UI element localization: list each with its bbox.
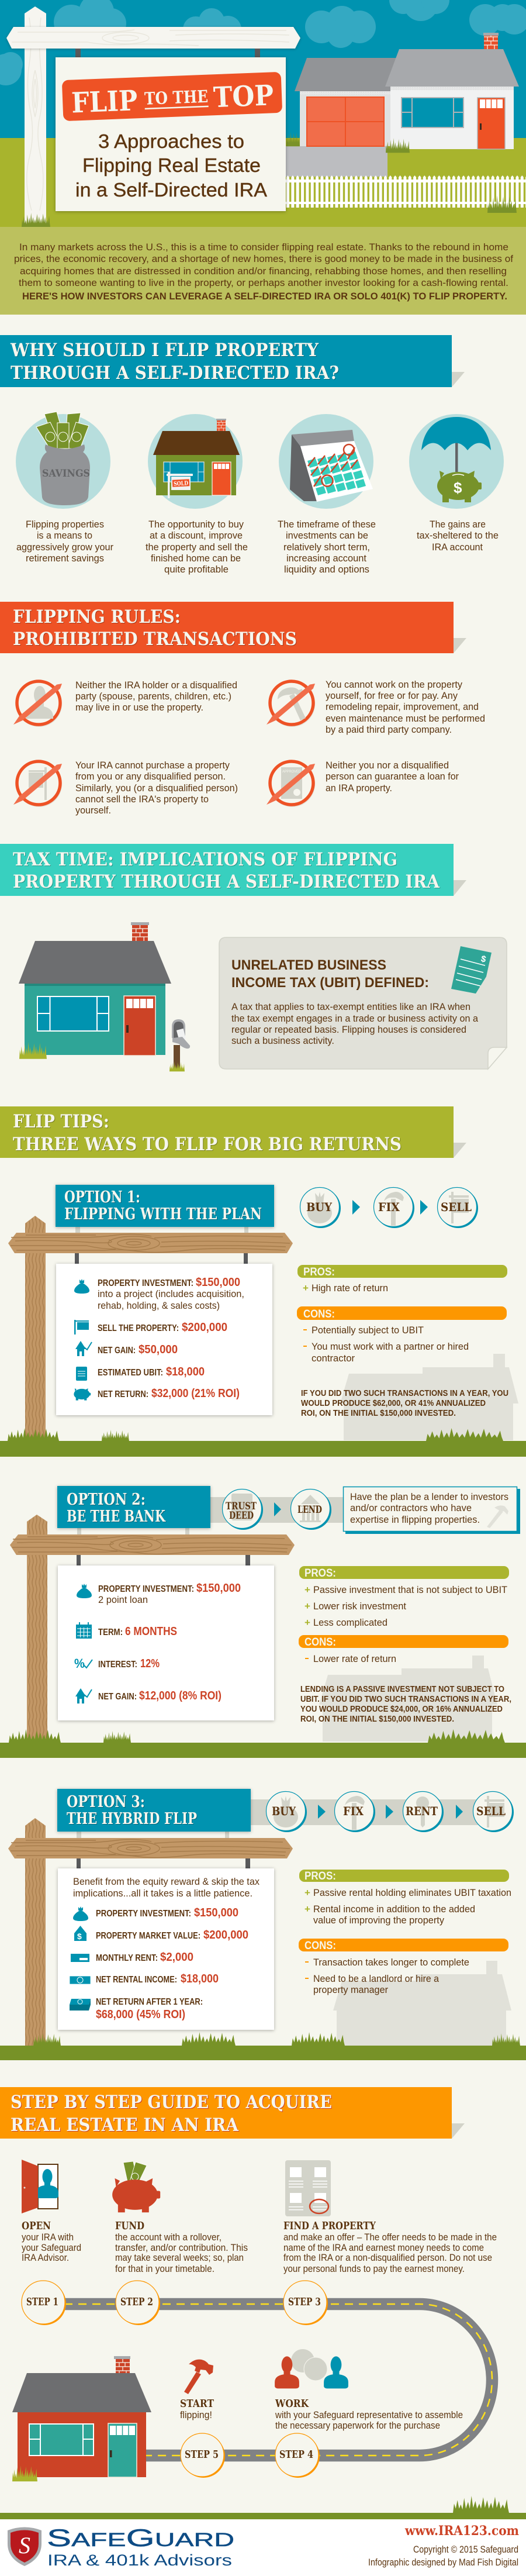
text: fund: transfer, and/or contribution. This (115, 2242, 248, 2253)
text: rule 4: person can guarantee a loan for (326, 771, 459, 782)
step 3: STEP 3 (288, 2296, 321, 2308)
cons (297, 1306, 507, 1364)
pros: + (304, 1617, 310, 1628)
icon: hammer (184, 2360, 213, 2394)
callout: UBIT definition: the tax exempt engages in a trade or business activity on a (231, 1013, 479, 1024)
icon: umbrella and piggy bank (409, 414, 504, 509)
text: reason 3: The timeframe of these (278, 519, 376, 530)
text: rule 2: yourself, for free or for pay. Any (326, 690, 458, 701)
trust deed to lend process: LEND (297, 1504, 322, 1516)
text: rule 3: yourself. (75, 805, 111, 816)
text: open: your Safeguard (22, 2242, 81, 2253)
title: in a Self-Directed IRA (75, 179, 267, 201)
text: rule 3: from you or any disqualified person. (75, 771, 226, 782)
heading: step by step (0, 2087, 465, 2139)
option sign (57, 1789, 251, 1832)
text: open: IRA Advisor. (22, 2252, 69, 2263)
details board: PROPERTY INVESTMENT: (98, 1278, 193, 1288)
step 5 (181, 2433, 225, 2478)
option sign: BE THE BANK (67, 1508, 166, 1526)
intro text band: HERE'S HOW INVESTORS CAN LEVERAGE A SELF-DIRECTED IRA OR SOLO 401(K) TO FLIP PROPERTY. (22, 291, 507, 302)
pros: Passive investment that is not subject to UBIT (313, 1584, 507, 1595)
details board: $12,000 (8% ROI) (139, 1689, 222, 1702)
flip to the top badge: TOP (213, 79, 274, 114)
text: rule 2: You cannot work on the property (326, 679, 462, 690)
pros: Passive rental holding eliminates UBIT taxation (313, 1887, 511, 1898)
text: rule 3 (75, 760, 238, 816)
trust deed to lend process: DEED (229, 1510, 254, 1522)
icon: umbrella and piggy bank: $ (454, 479, 462, 496)
intro text band: acquiring homes that are distressed in condition and/or financing, rehabbing those homes, and then reselling (20, 265, 507, 277)
panel: reasons (16, 412, 504, 575)
details board: MONTHLY RENT: (96, 1953, 158, 1963)
text: reason 2: finished home can be (151, 553, 241, 564)
illustration: teal house with mailbox (19, 922, 190, 1071)
pros: PROS: (303, 1266, 335, 1278)
text: reason 4: IRA account (432, 542, 483, 553)
text: rule 2: by a paid third party company. (326, 724, 452, 735)
text: rule 4: an IRA property. (326, 782, 392, 794)
text: rule 2: even maintenance must be performed (326, 713, 485, 724)
lending note: YOU WOULD PRODUCE $24,000, OR 16% ANNUALIZED (300, 1705, 503, 1714)
chimney (483, 33, 499, 49)
buy fix sell process: FIX (378, 1200, 400, 1214)
text: start: flipping! (180, 2409, 212, 2420)
text: reason 2: quite profitable (164, 564, 229, 575)
annualized note: WOULD PRODUCE $62,000, OR 41% ANNUALIZED (301, 1399, 486, 1408)
details board: NET RENTAL INCOME: (96, 1975, 177, 1985)
panel: step by step road (12, 2160, 497, 2481)
post (25, 1818, 46, 2046)
cons: Potentially subject to UBIT (312, 1325, 424, 1336)
text: reason 2: the property and sell the (146, 542, 248, 553)
text: rule 3: cannot sell the IRA's property to (75, 794, 209, 805)
title (75, 130, 267, 201)
option sign: FLIPPING WITH THE PLAN (64, 1205, 262, 1223)
text: fund: FUND (115, 2220, 144, 2232)
details board: $32,000 (21% ROI) (151, 1387, 240, 1400)
text: reason 1: retirement savings (26, 553, 104, 564)
text: rule 2 (326, 679, 485, 735)
step 1 (22, 2281, 66, 2325)
post (27, 1515, 47, 1743)
driveway (286, 146, 387, 177)
cons: Need to be a landlord or hire a (313, 1973, 440, 1984)
icon: tax document (451, 946, 492, 994)
callout: be a lender (344, 1487, 520, 1534)
cons: contractor (312, 1353, 355, 1364)
text: find a property: and make an offer – The offer needs to be made in the (283, 2232, 497, 2243)
details board: NET GAIN: (98, 1692, 137, 1702)
details board (56, 1264, 272, 1415)
text: reason 3: relatively short term, (283, 542, 370, 553)
website and credits: www.IRA123.com (404, 2523, 519, 2539)
ground (0, 2046, 526, 2060)
text: rule 1: may live in or use the property. (75, 702, 203, 713)
hero: sky, sign and house (0, 0, 526, 227)
details board: $18,000 (181, 1972, 219, 1985)
lending note: ROI, ON THE INITIAL $150,000 INVESTED. (300, 1715, 454, 1724)
intro text band: them to someone wanting to live in the property, or perhaps another investor looking for a cash-flowing rental. (19, 277, 508, 288)
heading: flipping rules (0, 602, 466, 653)
safeguard logo (8, 2524, 234, 2569)
icon: savings jar (16, 412, 110, 509)
text: start (180, 2398, 214, 2420)
pros: + (304, 1903, 310, 1915)
lending note: LENDING IS A PASSIVE INVESTMENT NOT SUBJECT TO (300, 1685, 504, 1694)
callout: be a lender: expertise in flipping properties. (350, 1514, 480, 1525)
intro text band: prices, the economic recovery, and a shortage of new homes, there is good money to be made in the business of (14, 253, 513, 264)
title: 3 Approaches to (98, 130, 244, 152)
trust deed to lend process (222, 1489, 331, 1530)
text: work: with your Safeguard representative to assemble (275, 2409, 463, 2420)
sign post (25, 6, 46, 227)
website and credits (368, 2523, 519, 2568)
pros: + (304, 1601, 310, 1612)
road (47, 2304, 492, 2456)
step 1: STEP 1 (26, 2296, 58, 2308)
cons: property manager (313, 1984, 388, 1995)
sign hangers (75, 49, 260, 61)
text: reason 3 (278, 519, 376, 575)
text: rule 3: Similarly, you (or a disqualified person) (75, 782, 238, 794)
pros: + (304, 1887, 310, 1898)
heading: flipping rules: PROHIBITED TRANSACTIONS (13, 629, 297, 650)
text: work: the necessary paperwork for the purchase (275, 2420, 440, 2431)
panel: option 1 (0, 1185, 526, 1457)
step 4 (275, 2433, 320, 2478)
option sign: OPTION 1: (64, 1188, 140, 1206)
callout: be a lender: and/or contractors who have (350, 1502, 472, 1513)
heading: step by step: REAL ESTATE IN AN IRA (11, 2115, 239, 2136)
details board: 12% (140, 1657, 160, 1670)
text: reason 4: tax-sheltered to the (417, 530, 499, 541)
text: find a property: from the IRA or a non-disqualified person. Do not use (283, 2252, 492, 2263)
pros: PROS: (304, 1870, 336, 1882)
cons: CONS: (304, 1940, 336, 1952)
heading: why should I flip: WHY SHOULD I FLIP PROPERTY (10, 340, 319, 361)
details board: NET RETURN: (98, 1389, 148, 1399)
pros (299, 1870, 511, 1926)
pros (299, 1566, 509, 1628)
buy fix rent sell process: SELL (476, 1804, 506, 1818)
post (25, 1216, 46, 1441)
cons (299, 1939, 508, 1995)
icon: no sign (13, 761, 62, 807)
panel: option 3 (0, 1789, 526, 2060)
text: fund (115, 2220, 248, 2274)
window (402, 98, 463, 127)
icon: property listings (285, 2160, 331, 2216)
callout: be a lender: Have the plan be a lender to investors (350, 1491, 508, 1502)
text: open: your IRA with (22, 2232, 74, 2243)
heading: why should I flip: THROUGH A SELF-DIRECTED IRA? (11, 363, 339, 384)
details board: NET RETURN AFTER 1 YEAR: (96, 1997, 203, 2007)
sign board (56, 57, 286, 211)
text: find a property (283, 2220, 497, 2274)
details board: INTEREST: (98, 1660, 137, 1670)
option sign: OPTION 3: (67, 1793, 145, 1811)
flip to the top badge: FLIP (71, 84, 138, 120)
text: reason 3: increasing account (286, 553, 366, 564)
details board: PROPERTY INVESTMENT: (96, 1909, 191, 1919)
intro text band (0, 227, 526, 315)
text: find a property: name of the IRA and earnest money needs to come (283, 2242, 484, 2253)
text: open (22, 2220, 81, 2263)
text: reason 1: is a means to (37, 530, 92, 541)
text: open: OPEN (22, 2220, 51, 2232)
details board: implications...all it takes is a little patience. (73, 1888, 252, 1899)
text: rule 1: party (spouse, parents, children, etc.) (75, 691, 231, 702)
callout: UBIT definition (219, 937, 507, 1069)
details board (58, 1565, 274, 1720)
intro text band: In many markets across the U.S., this is a time to consider flipping real estate. Thanks to the rebound in home (19, 242, 508, 253)
cons: CONS: (303, 1308, 335, 1320)
icon: no person (13, 681, 62, 727)
callout: UBIT definition: UNRELATED BUSINESS (231, 957, 386, 973)
details board: $200,000 (203, 1929, 248, 1942)
house illustration (286, 33, 519, 177)
footer (0, 2496, 526, 2576)
step 2: STEP 2 (120, 2296, 153, 2308)
text: rule 4: Neither you nor a disqualified (326, 760, 449, 771)
title: Flipping Real Estate (82, 154, 261, 176)
details board: rehab, holding, & sales costs) (98, 1300, 220, 1311)
heading: why should I flip (0, 335, 465, 387)
annualized note (301, 1389, 508, 1418)
buy fix rent sell process: RENT (406, 1804, 438, 1818)
pros: High rate of return (312, 1282, 388, 1294)
heading: flip tips: THREE WAYS TO FLIP FOR BIG RETURNS (13, 1134, 402, 1155)
text: find a property: your personal funds to pay the earnest money. (283, 2263, 465, 2274)
details board: $ (77, 1932, 82, 1941)
pros: + (304, 1584, 310, 1595)
details board: $150,000 (194, 1906, 238, 1919)
pros: PROS: (304, 1567, 336, 1580)
text: reason 1: Flipping properties (26, 519, 104, 530)
icon: piggy bank with money (112, 2161, 160, 2212)
text: reason 1: aggressively grow your (16, 542, 113, 553)
icon: calendar (279, 414, 373, 509)
details board: NET GAIN: (98, 1346, 136, 1356)
icon: tax document: $ (480, 954, 487, 965)
text: reason 3: investments can be (286, 530, 368, 541)
icon: no approved loan: APPROVED (282, 770, 302, 774)
safeguard logo: IRA & 401k Advisors (47, 2551, 232, 2569)
details board: $150,000 (196, 1582, 241, 1595)
details board: into a project (includes acquisition, (98, 1288, 244, 1299)
cons: Lower rate of return (313, 1653, 396, 1664)
pros (297, 1265, 507, 1294)
heading: step by step: STEP BY STEP GUIDE TO ACQUIRE (11, 2092, 332, 2113)
details board: $200,000 (182, 1321, 227, 1334)
heading: tax time (0, 844, 466, 896)
details board: $150,000 (196, 1276, 240, 1289)
details board: 6 MONTHS (125, 1625, 177, 1638)
step 5: STEP 5 (185, 2449, 219, 2461)
icon: sold house: SOLD (174, 480, 189, 488)
step 2 (116, 2281, 160, 2325)
pros: Rental income in addition to the added (313, 1903, 475, 1915)
flip to the top badge (62, 72, 282, 121)
buy fix sell process: BUY (306, 1200, 333, 1214)
heading: tax time: TAX TIME: IMPLICATIONS OF FLIPPING (13, 849, 397, 870)
heading: tax time: PROPERTY THROUGH A SELF-DIRECTED IRA (13, 871, 440, 892)
ground (0, 1743, 526, 1758)
callout: UBIT definition: INCOME TAX (UBIT) DEFINED: (231, 975, 429, 991)
lending note (300, 1685, 511, 1724)
text: rule 4 (326, 760, 459, 794)
text: fund: for that in your timetable. (115, 2263, 214, 2274)
text: fund: the account with a rollover, (115, 2232, 222, 2243)
callout: UBIT definition: such a business activity. (231, 1035, 334, 1046)
text: work (275, 2398, 463, 2431)
details board: % (74, 1656, 85, 1671)
heading: flip tips: FLIP TIPS: (13, 1111, 109, 1132)
option sign: OPTION 2: (67, 1491, 146, 1509)
door (477, 98, 505, 149)
step 4: STEP 4 (279, 2449, 313, 2461)
option sign: THE HYBRID FLIP (67, 1810, 197, 1828)
details board: SELL THE PROPERTY: (98, 1323, 179, 1333)
safeguard logo: S AFE G UARD (47, 2524, 234, 2551)
safeguard logo: S (19, 2532, 30, 2558)
pros: Less complicated (313, 1617, 387, 1628)
illustration: red house (12, 2356, 151, 2481)
icon: conversation (275, 2349, 348, 2388)
buy fix rent sell process: BUY (272, 1804, 296, 1818)
text: rule 1 (75, 680, 237, 713)
details board: ESTIMATED UBIT: (98, 1368, 163, 1378)
text: start: START (180, 2398, 214, 2410)
details board: 2 point loan (98, 1594, 148, 1605)
cons (299, 1635, 508, 1664)
flip to the top badge: TO THE (144, 87, 209, 109)
details board: $18,000 (166, 1365, 205, 1378)
text: reason 2: at a discount, improve (150, 530, 243, 541)
heading: flipping rules: FLIPPING RULES: (13, 606, 181, 627)
garage door (307, 97, 384, 146)
white picket fence (286, 175, 526, 208)
annualized note: ROI, ON THE INITIAL $150,000 INVESTED. (301, 1409, 456, 1418)
option sign (56, 1185, 274, 1227)
icon: no approved loan (267, 761, 315, 807)
details board: TERM: (98, 1627, 123, 1637)
text: find a property: FIND A PROPERTY (283, 2220, 376, 2232)
text: rule 1: Neither the IRA holder or a disqualified (75, 680, 237, 691)
pros: value of improving the property (313, 1915, 444, 1926)
icon: door (22, 2160, 58, 2213)
text: rule 2: remodeling repair, improvement, and (326, 701, 479, 712)
cons: CONS: (304, 1636, 336, 1649)
details board (58, 1868, 274, 2030)
panel: option 2 (0, 1486, 526, 1758)
trust deed to lend process: TRUST (226, 1501, 257, 1512)
text: rule 3: Your IRA cannot purchase a property (75, 760, 230, 771)
details board: PROPERTY INVESTMENT: (98, 1584, 194, 1594)
text: reason 1 (16, 519, 113, 564)
buy fix rent sell process (267, 1792, 514, 1832)
icon: no hammer (267, 681, 315, 727)
pros: Lower risk investment (313, 1601, 406, 1612)
buy fix sell process: SELL (441, 1200, 472, 1214)
cons: You must work with a partner or hired (312, 1341, 469, 1352)
text: reason 3: liquidity and options (284, 564, 369, 575)
icon: mailbox (169, 1019, 190, 1071)
icon: sold house (148, 414, 243, 509)
heading: flip tips (0, 1106, 466, 1158)
text: fund: may take several weeks; so, plan (115, 2252, 244, 2263)
details board: $50,000 (139, 1343, 178, 1356)
details board: Benefit from the equity reward & skip the tax (73, 1876, 259, 1887)
annualized note: IF YOU DID TWO SUCH TRANSACTIONS IN A YEAR, YOU (301, 1389, 508, 1398)
text: reason 2 (146, 519, 248, 575)
text: reason 2: The opportunity to buy (148, 519, 244, 530)
panel: prohibited transactions (13, 679, 485, 816)
details board: $2,000 (160, 1951, 193, 1964)
text: reason 4 (417, 519, 499, 553)
option sign (57, 1486, 210, 1528)
details board: $68,000 (45% ROI) (96, 2008, 185, 2021)
text: work: WORK (275, 2398, 309, 2410)
icon: savings jar: SAVINGS (42, 468, 90, 480)
ground (0, 1441, 526, 1457)
clouds (0, 0, 526, 85)
step 3 (283, 2281, 328, 2325)
buy fix sell process (300, 1187, 478, 1228)
text: reason 4: The gains are (430, 519, 486, 530)
cons: Transaction takes longer to complete (313, 1957, 469, 1968)
pros: + (303, 1282, 309, 1294)
sign crossbar (6, 27, 300, 49)
callout: UBIT definition: regular or repeated basis. Flipping houses is considered (231, 1024, 466, 1035)
buy fix rent sell process: FIX (343, 1804, 364, 1818)
details board: PROPERTY MARKET VALUE: (96, 1931, 200, 1941)
callout: UBIT definition: A tax that applies to tax-exempt entities like an IRA when (231, 1001, 470, 1012)
